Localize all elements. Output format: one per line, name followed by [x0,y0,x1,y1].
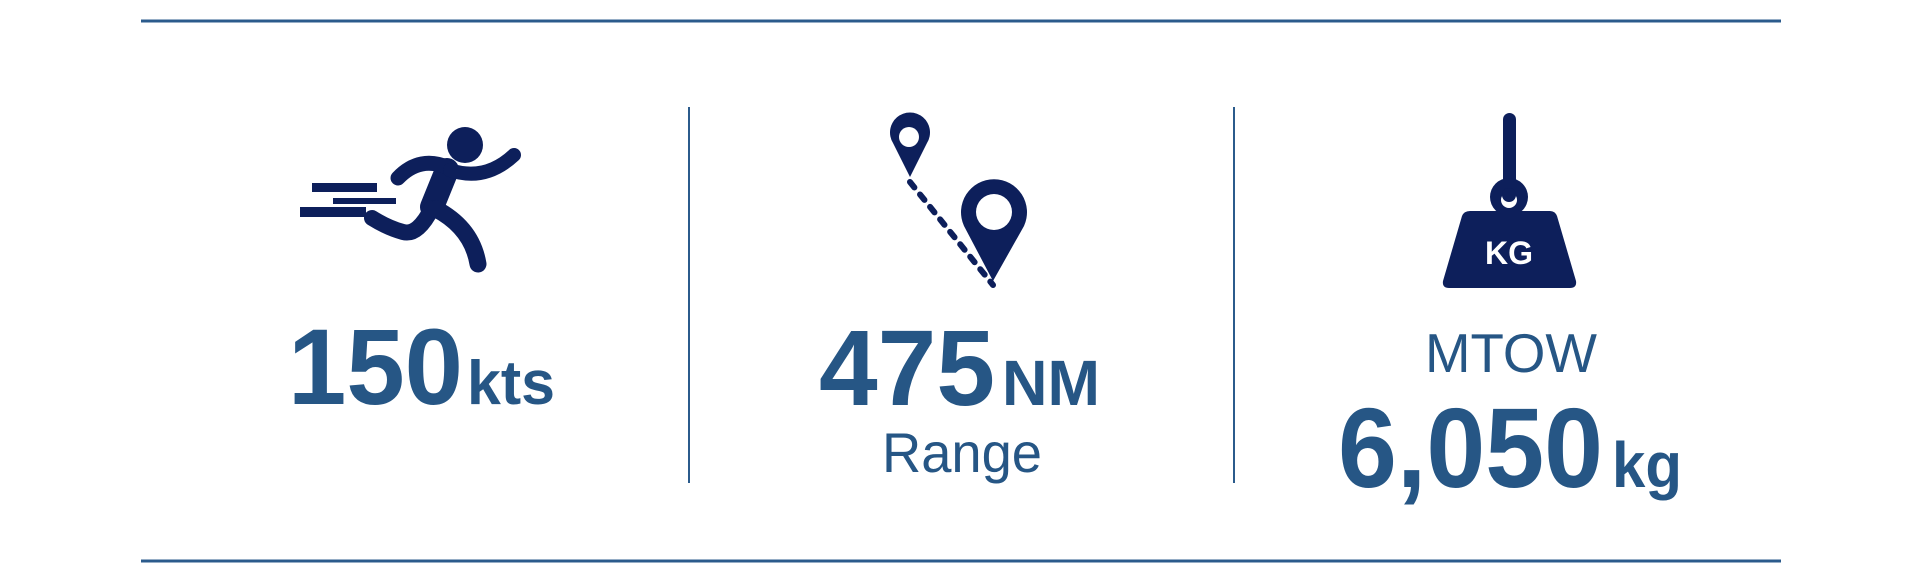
value: 150kts: kts [467,349,555,418]
value: 475NM: 475 [819,307,995,428]
panel: MTOW [1338,113,1682,511]
icon: map pins with dashed route [890,112,1027,285]
value: 475NM: NM [1002,347,1100,419]
panel: speed [288,127,555,427]
value: 150kts [288,306,555,427]
panel: range [819,112,1100,484]
value: 6,050kg: 6,050 [1338,385,1603,511]
icon: KG weight: KG [1485,235,1533,271]
icon: running man [300,127,514,264]
value: 475NM [819,307,1100,428]
label: MTOW: MTOW [1425,322,1597,384]
value: 6,050kg: kg [1612,429,1682,501]
label: Range: Range [882,421,1042,484]
icon: KG weight [1443,113,1576,288]
value: 150kts: 150 [288,306,463,427]
